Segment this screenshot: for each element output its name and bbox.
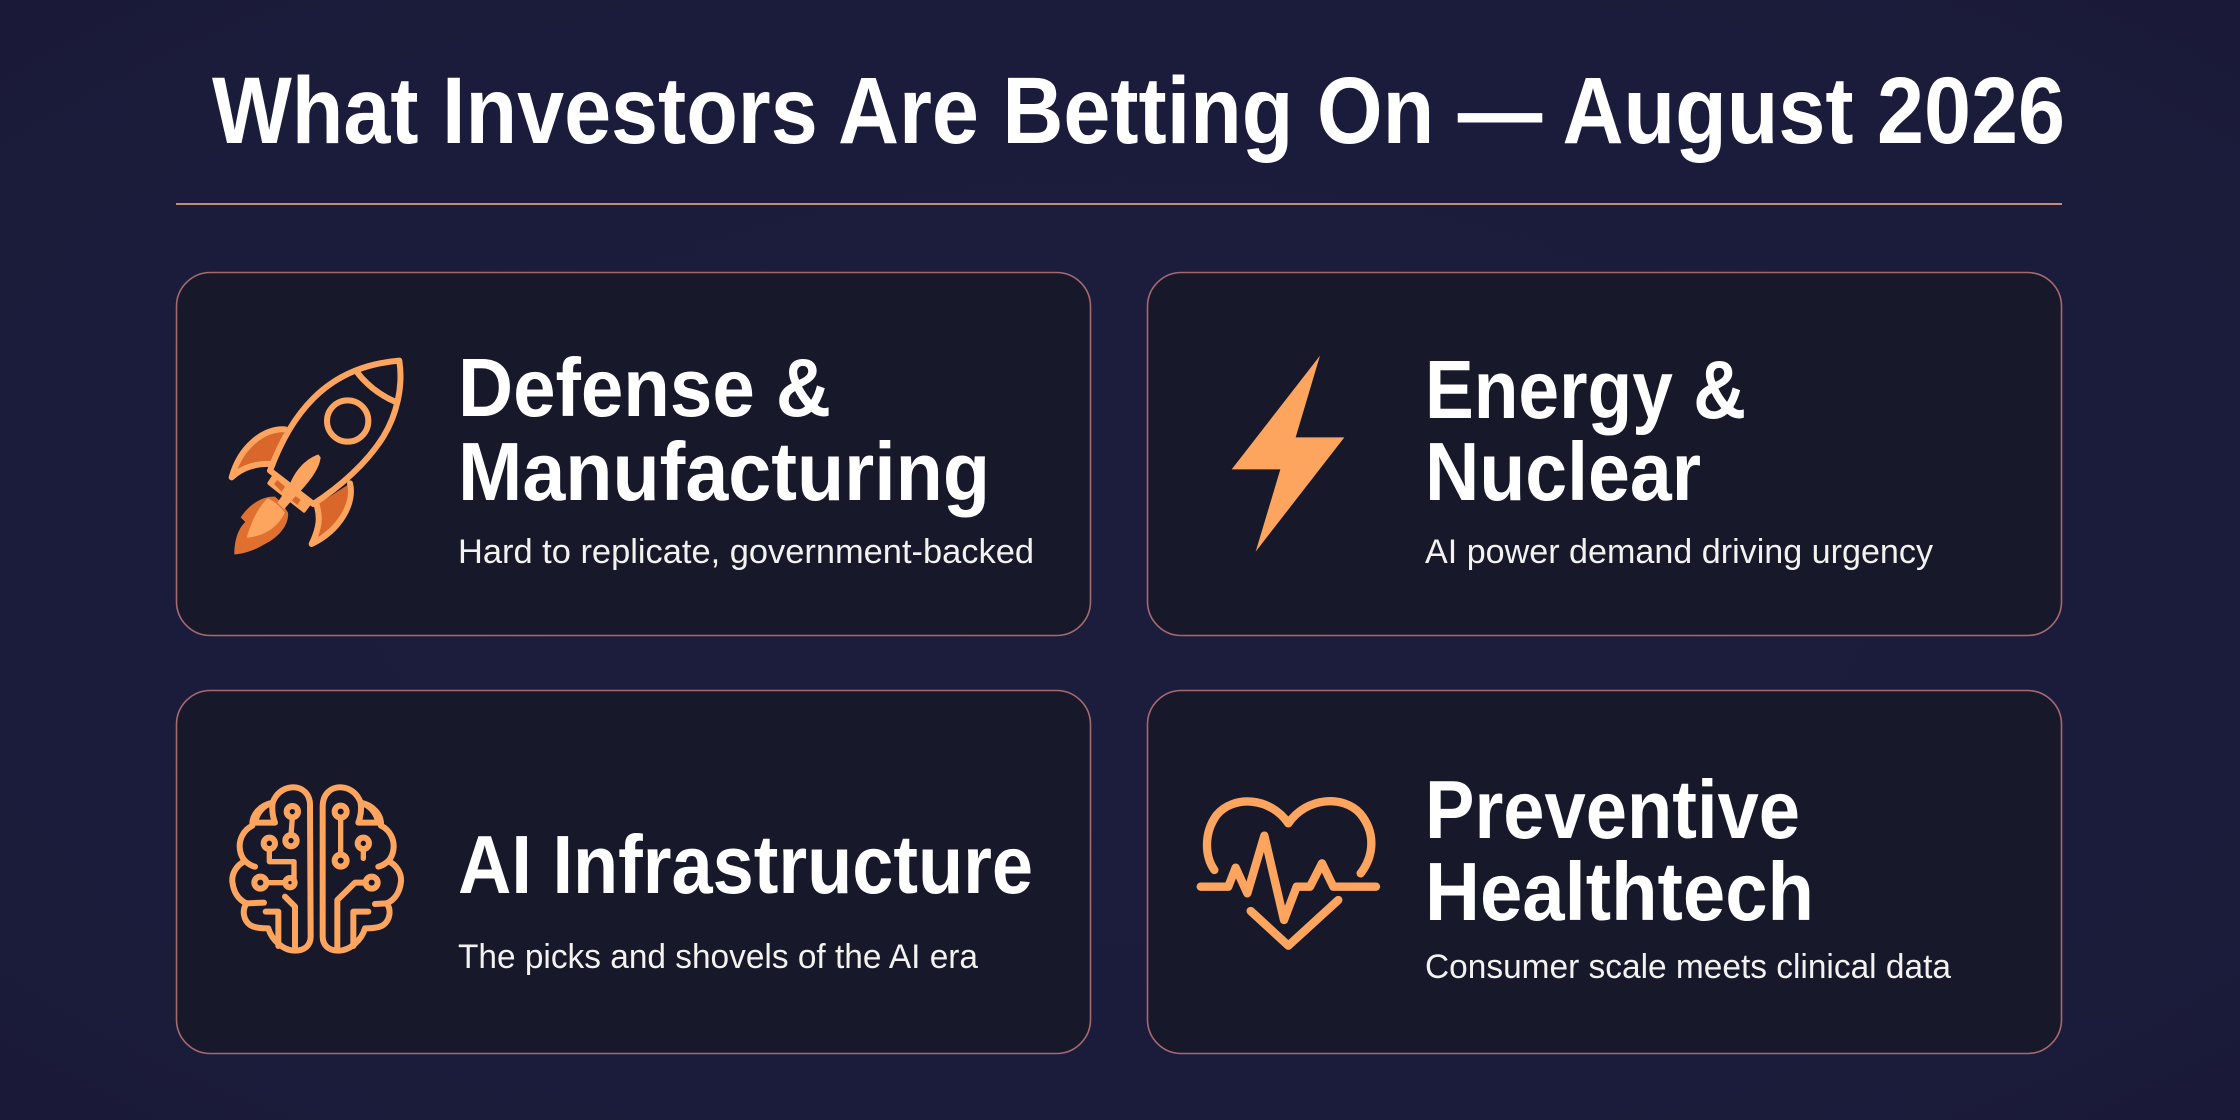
heading: Energy & xyxy=(1425,343,1746,436)
icon: brain circuit xyxy=(232,787,401,951)
heading: AI Infrastructure xyxy=(458,818,1033,911)
heading: Defense & xyxy=(458,341,831,434)
title divider xyxy=(176,203,2062,205)
icon: rocket xyxy=(232,361,400,554)
heading: Preventive xyxy=(1425,763,1800,856)
description: Consumer scale meets clinical data xyxy=(1425,948,1951,986)
panel: energy and nuclear xyxy=(1148,272,2062,636)
heading xyxy=(1425,763,1814,938)
title: What Investors Are Betting On — August 2026 xyxy=(212,58,2065,164)
heading: Manufacturing xyxy=(458,425,990,518)
panel: preventive healthtech xyxy=(1148,690,2062,1054)
icon: lightning bolt xyxy=(1232,356,1344,552)
description: Hard to replicate, government-backed xyxy=(458,533,1034,571)
panel: defense and manufacturing xyxy=(176,272,1090,636)
description: The picks and shovels of the AI era xyxy=(458,938,978,976)
description: AI power demand driving urgency xyxy=(1425,533,1933,571)
icon: heart with pulse xyxy=(1201,801,1376,946)
heading xyxy=(1425,343,1746,518)
heading xyxy=(458,341,990,518)
heading: Healthtech xyxy=(1425,845,1814,938)
panel: AI infrastructure xyxy=(176,690,1090,1054)
heading: Nuclear xyxy=(1425,425,1701,518)
